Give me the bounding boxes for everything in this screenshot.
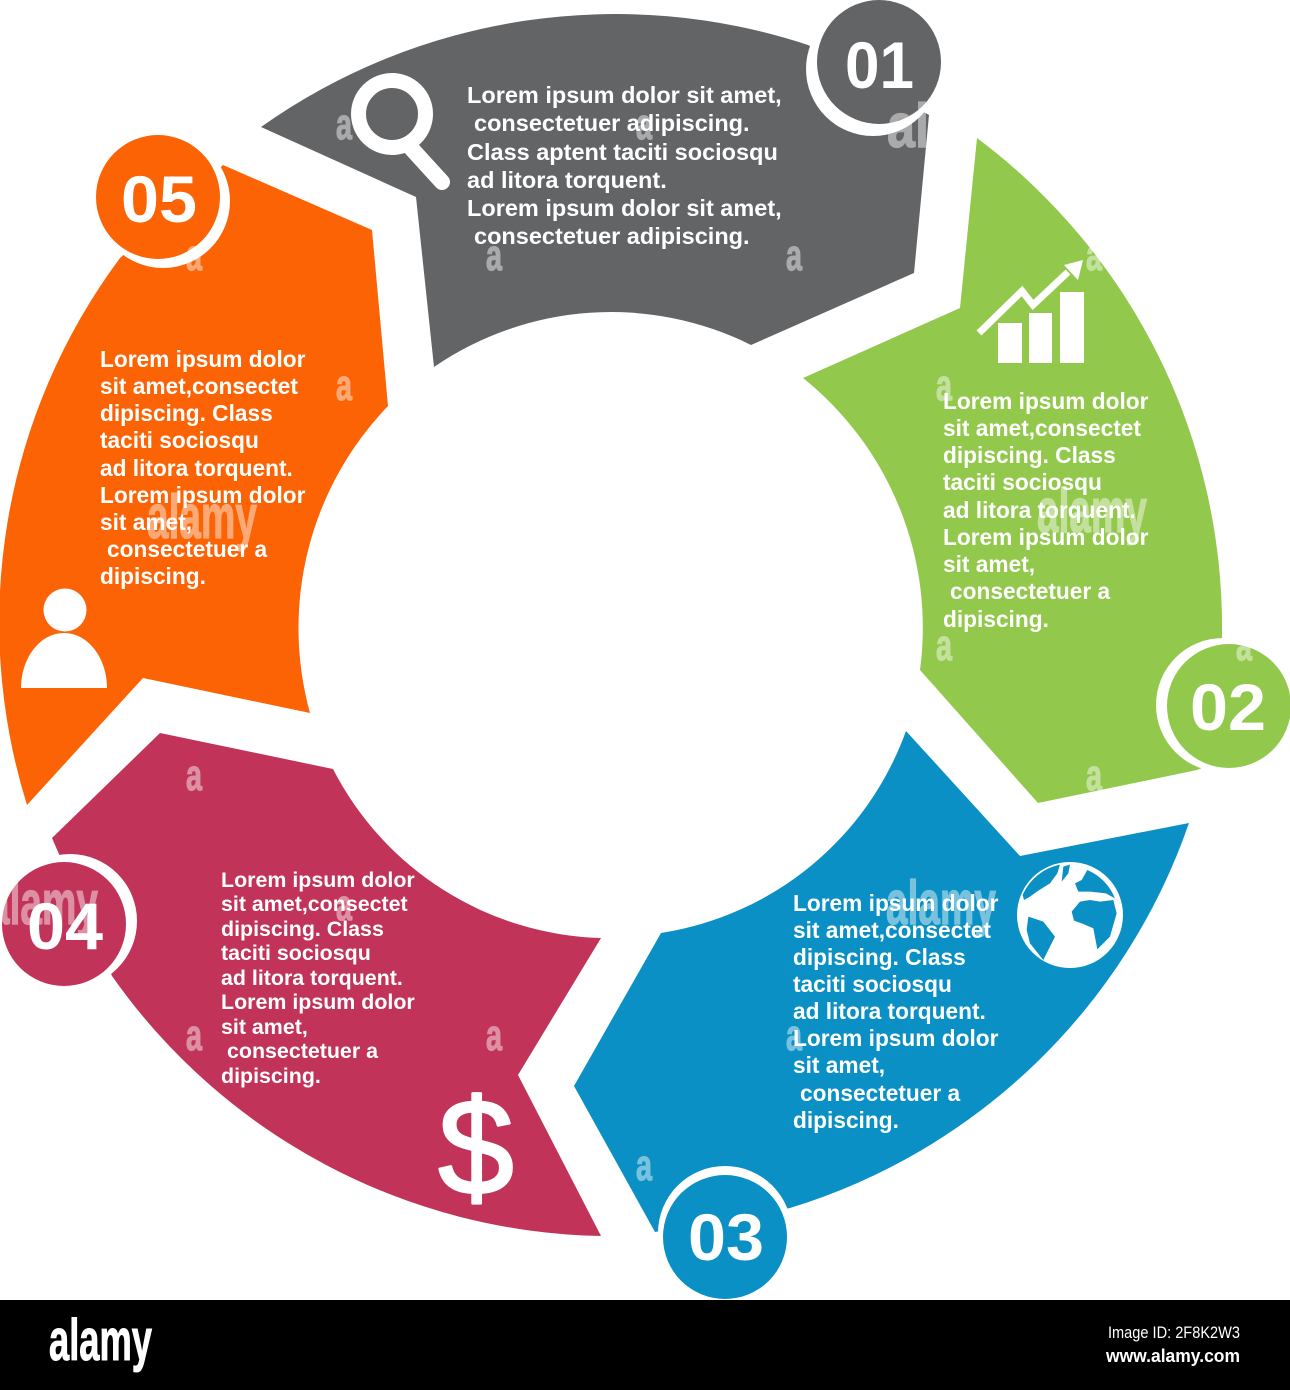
number 05: 05 xyxy=(121,162,197,236)
text: step 03: sit amet,consectet xyxy=(793,917,991,943)
panel: step 03 blue xyxy=(574,731,1189,1300)
watermark words: al xyxy=(887,92,929,161)
text: step 02: dipiscing. xyxy=(943,606,1049,632)
text: step 02: sit amet,consectet xyxy=(943,415,1141,441)
text: step 02: Lorem ipsum dolor xyxy=(943,524,1149,550)
icon: magnifying glass xyxy=(358,80,442,182)
badge 03 xyxy=(663,1175,787,1299)
watermark letters: a xyxy=(786,231,802,280)
text: step 02: sit amet, xyxy=(943,551,1035,577)
watermark letters: a xyxy=(936,361,952,410)
text: step 05: Lorem ipsum dolor xyxy=(100,346,305,372)
watermark letters: a xyxy=(1086,231,1102,280)
text: step 02: taciti sociosqu xyxy=(943,469,1102,495)
text: step 02: ad litora torquent. xyxy=(943,497,1136,523)
number 02: 02 xyxy=(1190,670,1266,744)
watermark words: alamy xyxy=(147,483,257,552)
footer website: www.alamy.com xyxy=(1105,1346,1240,1366)
text: step 02: dipiscing. Class xyxy=(943,442,1116,468)
panel: step 02 green xyxy=(803,138,1290,803)
watermark words xyxy=(0,92,1147,938)
text: step 03: sit amet, xyxy=(793,1052,885,1078)
text: step 03: taciti sociosqu xyxy=(793,971,952,997)
badge 04 xyxy=(2,862,126,986)
text: step 01: consectetuer adipiscing. xyxy=(474,223,750,249)
text: step 01: Lorem ipsum dolor sit amet, xyxy=(467,82,782,108)
watermark letters: a xyxy=(786,1011,802,1060)
panel: step 05 orange xyxy=(0,134,388,805)
icon: globe xyxy=(1017,862,1123,968)
text: step 03: dipiscing. xyxy=(793,1107,899,1133)
watermark words: alamy xyxy=(886,869,996,938)
text: step 02: consectetuer a xyxy=(950,578,1111,604)
text: step 05: sit amet, xyxy=(100,509,192,535)
icon: growth chart xyxy=(979,260,1084,363)
watermark letters xyxy=(186,100,1252,1190)
icon: person xyxy=(21,588,107,688)
watermark letters: a xyxy=(186,231,202,280)
text: step 05: Lorem ipsum dolor xyxy=(100,482,306,508)
text: step 03: consectetuer a xyxy=(800,1080,961,1106)
badge 02 xyxy=(1167,644,1290,768)
text: step 04: sit amet,consectet xyxy=(221,892,408,916)
text: step 01: Class aptent taciti sociosqu xyxy=(467,139,778,165)
text: step 03: ad litora torquent. xyxy=(793,998,986,1024)
watermark words: alamy xyxy=(1037,477,1147,546)
watermark letters: a xyxy=(486,1011,502,1060)
panel: step 01 grey xyxy=(261,0,941,367)
text: step 04: taciti sociosqu xyxy=(221,941,371,965)
text: step 05: dipiscing. xyxy=(100,563,206,589)
watermark letters: a xyxy=(186,1011,202,1060)
watermark letters: a xyxy=(336,361,352,410)
watermark letters: a xyxy=(336,881,352,930)
text: step 04: sit amet, xyxy=(221,1015,308,1039)
badge ring 02 xyxy=(1156,638,1290,772)
text: step 04: consectetuer a xyxy=(227,1039,379,1063)
text: step 04: Lorem ipsum dolor xyxy=(221,990,415,1014)
number 01: 01 xyxy=(845,28,914,102)
text: step 05: consectetuer a xyxy=(107,536,268,562)
watermark letters: a xyxy=(636,1141,652,1190)
badge 01 xyxy=(817,0,941,124)
text: step 01: ad litora torquent. xyxy=(467,167,667,193)
text: step 04: Lorem ipsum dolor xyxy=(221,868,415,892)
badge ring 01 xyxy=(806,2,940,136)
text: step 05: sit amet,consectet xyxy=(100,373,298,399)
text: step 05: ad litora torquent. xyxy=(100,455,293,481)
watermark letters: a xyxy=(336,100,352,149)
text: step 04: dipiscing. Class xyxy=(221,917,384,941)
watermark letters: a xyxy=(1086,751,1102,800)
text: step 02: Lorem ipsum dolor xyxy=(943,388,1148,414)
text: step 03: Lorem ipsum dolor xyxy=(793,890,998,916)
footer logo: alamy xyxy=(49,1308,152,1373)
badge 05 xyxy=(96,135,220,259)
icon: dollar sign: $ xyxy=(438,1071,514,1223)
text: step 05: taciti sociosqu xyxy=(100,427,259,453)
badge ring 03 xyxy=(658,1166,792,1300)
badge ring 05 xyxy=(96,134,230,268)
number 03: 03 xyxy=(688,1200,764,1274)
text: step 01: Lorem ipsum dolor sit amet, xyxy=(467,195,782,221)
footer bar xyxy=(0,1300,1290,1390)
watermark letters: a xyxy=(936,621,952,670)
panel: step 04 crimson xyxy=(2,733,601,1236)
badge ring 04 xyxy=(3,854,137,988)
text: step 04: dipiscing. xyxy=(221,1064,321,1088)
text: step 03: Lorem ipsum dolor xyxy=(793,1025,999,1051)
text: step 03: dipiscing. Class xyxy=(793,944,966,970)
number 04: 04 xyxy=(27,889,103,963)
text: step 01: consectetuer adipiscing. xyxy=(474,110,750,136)
footer image id: Image ID: 2F8K2W3 xyxy=(1108,1323,1240,1342)
watermark letters: a xyxy=(486,231,502,280)
watermark letters: a xyxy=(186,751,202,800)
text: step 05: dipiscing. Class xyxy=(100,400,273,426)
text: step 04: ad litora torquent. xyxy=(221,966,403,990)
watermark letters: a xyxy=(636,100,652,149)
watermark letters: a xyxy=(1236,621,1252,670)
